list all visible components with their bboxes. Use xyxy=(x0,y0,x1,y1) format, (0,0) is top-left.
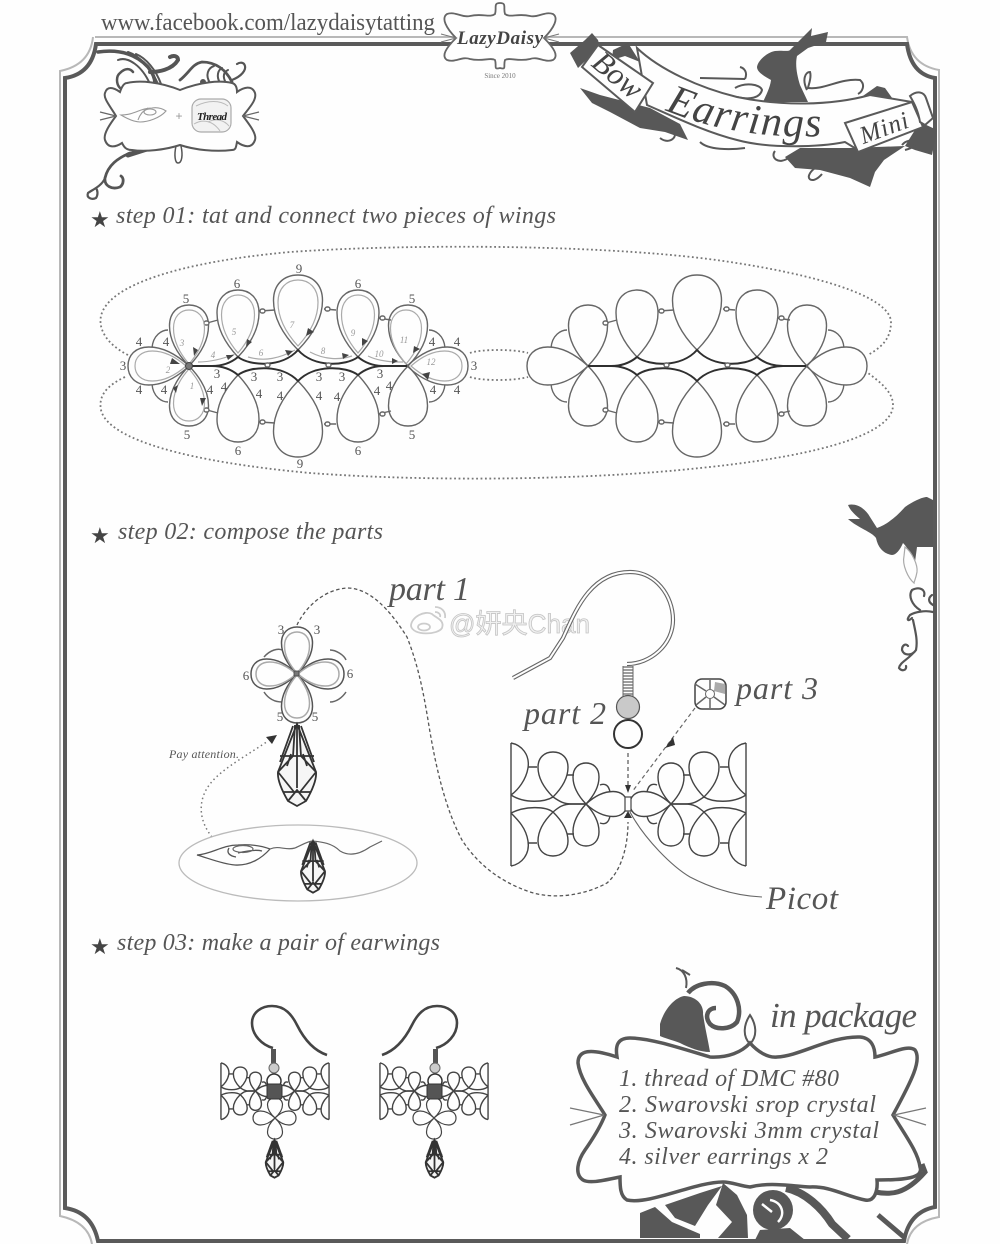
stitch counts: 6 xyxy=(235,443,242,458)
inner working lines xyxy=(135,280,462,421)
flower stitch counts xyxy=(243,622,354,724)
stitch counts: 6 xyxy=(234,276,241,291)
stitch counts: 4 xyxy=(334,389,341,404)
banner: Bow Earrings Mini xyxy=(570,28,933,187)
stitch counts: 4 xyxy=(454,334,461,349)
stitch counts: 5 xyxy=(183,291,189,306)
rabbit xyxy=(848,497,933,562)
stitch counts: 4 xyxy=(386,378,393,393)
step 02 heading xyxy=(90,519,383,549)
logo: Lazy Daisy xyxy=(441,3,559,80)
cartouche outline xyxy=(105,82,255,151)
plus sign: + xyxy=(175,109,183,123)
stitch counts: 6 xyxy=(355,276,362,291)
package panel xyxy=(570,968,926,1240)
stitch counts: 3 xyxy=(316,369,322,384)
stitch counts: 4 xyxy=(221,379,228,394)
direction arrows xyxy=(170,328,430,406)
arrowhead xyxy=(266,735,277,744)
stitch counts: 4 xyxy=(136,334,143,349)
part 1 label: part 1 xyxy=(387,571,470,608)
dotted wing connectors xyxy=(100,247,893,479)
stitch counts: 4 xyxy=(429,334,436,349)
website url: www.facebook.com/lazydaisytatting xyxy=(101,10,435,36)
stitch counts: 4 xyxy=(430,382,437,397)
coil xyxy=(623,667,633,694)
star: ★ xyxy=(90,935,110,960)
flag text Bow: Bow xyxy=(586,44,651,106)
bead xyxy=(616,696,640,718)
step 01 heading xyxy=(90,203,556,233)
scroll end xyxy=(910,92,933,125)
stitch counts: 5 xyxy=(409,291,415,306)
jump ring xyxy=(614,720,642,748)
dashed route from part 1 xyxy=(297,588,628,896)
icon: shuttle xyxy=(121,108,166,122)
star: ★ xyxy=(90,208,110,233)
step numbers: 1 xyxy=(190,381,194,391)
stitch counts: 4 xyxy=(163,334,170,349)
stitch counts: 4 xyxy=(136,382,143,397)
step 03 heading xyxy=(90,930,440,960)
materials list: 2. Swarovski srop crystal xyxy=(619,1092,876,1118)
junction knot xyxy=(186,362,192,370)
rabbit silhouette xyxy=(757,28,828,102)
star: ★ xyxy=(90,524,110,549)
stitch counts: 4 xyxy=(207,382,214,397)
materials list: 4. silver earrings x 2 xyxy=(619,1144,828,1170)
picot label: Picot xyxy=(765,881,839,917)
rabbit with shuttle on frame xyxy=(848,497,933,670)
stitch counts: 4 xyxy=(374,383,381,398)
flower stitch counts: 5 xyxy=(312,709,318,724)
note: pay attention xyxy=(168,735,277,837)
stitch counts: 6 xyxy=(355,443,362,458)
stitch counts: 4 xyxy=(256,386,263,401)
materials list: 1. thread of DMC #80 xyxy=(619,1066,839,1092)
banner swirls xyxy=(660,67,915,180)
left earring xyxy=(221,1006,329,1178)
right earring xyxy=(380,1006,488,1178)
ornament below panel xyxy=(640,1164,925,1240)
part 3: crystal xyxy=(695,679,726,709)
right flag xyxy=(845,102,923,152)
part 3 label: part 3 xyxy=(734,670,818,706)
swirl xyxy=(899,588,933,670)
icon: thread ball xyxy=(192,99,231,132)
diagram: second wing xyxy=(527,275,867,457)
diagram: tatted wing with instructions xyxy=(120,261,477,471)
thread xyxy=(270,841,382,854)
thread label: Thread xyxy=(197,111,228,123)
part 2: ear hook xyxy=(513,572,673,748)
step numbers: 2 xyxy=(166,365,171,375)
step numbers: 10 xyxy=(374,349,384,359)
step numbers: 9 xyxy=(351,328,356,338)
materials list xyxy=(618,1066,879,1170)
flag text Mini: Mini xyxy=(855,107,912,150)
part 2 label: part 2 xyxy=(522,695,606,731)
ribbon title: Earrings xyxy=(664,86,820,146)
step 01 text: step 01: tat and connect two pieces of wings xyxy=(116,203,556,229)
flower stitch counts: 6 xyxy=(243,668,250,683)
shuttle xyxy=(197,845,270,865)
step 02 text: step 02: compose the parts xyxy=(118,519,383,545)
main ribbon xyxy=(637,48,912,150)
stitch counts xyxy=(120,261,477,471)
ornament above panel xyxy=(660,968,755,1052)
stitch counts: 3 xyxy=(471,358,477,373)
step numbers: 5 xyxy=(232,327,237,337)
stitch counts: 9 xyxy=(297,456,303,471)
inset: shuttle and thread on crystal xyxy=(179,825,417,901)
flower stitch counts: 3 xyxy=(314,622,320,637)
step numbers xyxy=(166,320,436,391)
stitch counts: 3 xyxy=(214,366,220,381)
stitch counts: 4 xyxy=(454,382,461,397)
centre picot xyxy=(625,797,631,811)
logo name: LazyDaisy xyxy=(456,28,544,49)
since 2010: Since 2010 xyxy=(484,72,516,80)
stitch counts: 9 xyxy=(296,261,302,276)
step numbers: 7 xyxy=(290,320,295,330)
part 1: drop crystal xyxy=(278,724,316,806)
stitch counts: 3 xyxy=(377,366,383,381)
flower knot xyxy=(294,671,299,676)
dotted arrow xyxy=(201,741,268,837)
step numbers: 11 xyxy=(400,335,408,345)
step numbers: 12 xyxy=(426,357,436,367)
materials list: 3. Swarovski 3mm crystal xyxy=(618,1118,879,1144)
stitch counts: 3 xyxy=(120,358,126,373)
stitch counts: 3 xyxy=(339,369,345,384)
stitch counts: 3 xyxy=(277,369,283,384)
dashed arrow: ring to picot xyxy=(625,753,631,793)
hook wire xyxy=(513,572,673,678)
icon: weibo xyxy=(411,607,445,633)
picot leader line xyxy=(630,812,762,897)
ornament: materials cartouche xyxy=(88,51,259,199)
left flag xyxy=(582,45,653,112)
step numbers: 3 xyxy=(179,338,185,348)
stitch counts: 4 xyxy=(277,388,284,403)
flower stitch counts: 6 xyxy=(347,666,354,681)
scrollwork above cartouche xyxy=(88,51,245,199)
stitch counts: 5 xyxy=(184,427,190,442)
part 2: bow pair xyxy=(511,743,746,866)
in package label: in package xyxy=(770,996,917,1035)
stitch counts: 5 xyxy=(409,427,415,442)
flower stitch counts: 5 xyxy=(277,709,283,724)
dashed arrow: crystal to picot xyxy=(632,708,695,792)
stitch counts: 4 xyxy=(316,388,323,403)
stitch counts: 4 xyxy=(161,382,168,397)
flower stitch counts: 3 xyxy=(278,622,284,637)
step numbers: 6 xyxy=(259,348,264,358)
stitch counts: 3 xyxy=(251,369,257,384)
step 03 text: step 03: make a pair of earwings xyxy=(117,930,440,956)
arrow: into picot xyxy=(624,811,632,818)
crystal xyxy=(301,841,325,893)
step numbers: 8 xyxy=(321,346,326,356)
step numbers: 4 xyxy=(211,350,216,360)
note: pay attention: Pay attention. xyxy=(168,747,239,761)
handle: @妍央Chan xyxy=(449,609,590,639)
part 1: flower motif xyxy=(243,622,354,724)
banner dark foliage xyxy=(570,33,937,187)
panel outline xyxy=(578,1037,921,1201)
watermark xyxy=(411,607,590,639)
shuttle xyxy=(904,547,917,583)
